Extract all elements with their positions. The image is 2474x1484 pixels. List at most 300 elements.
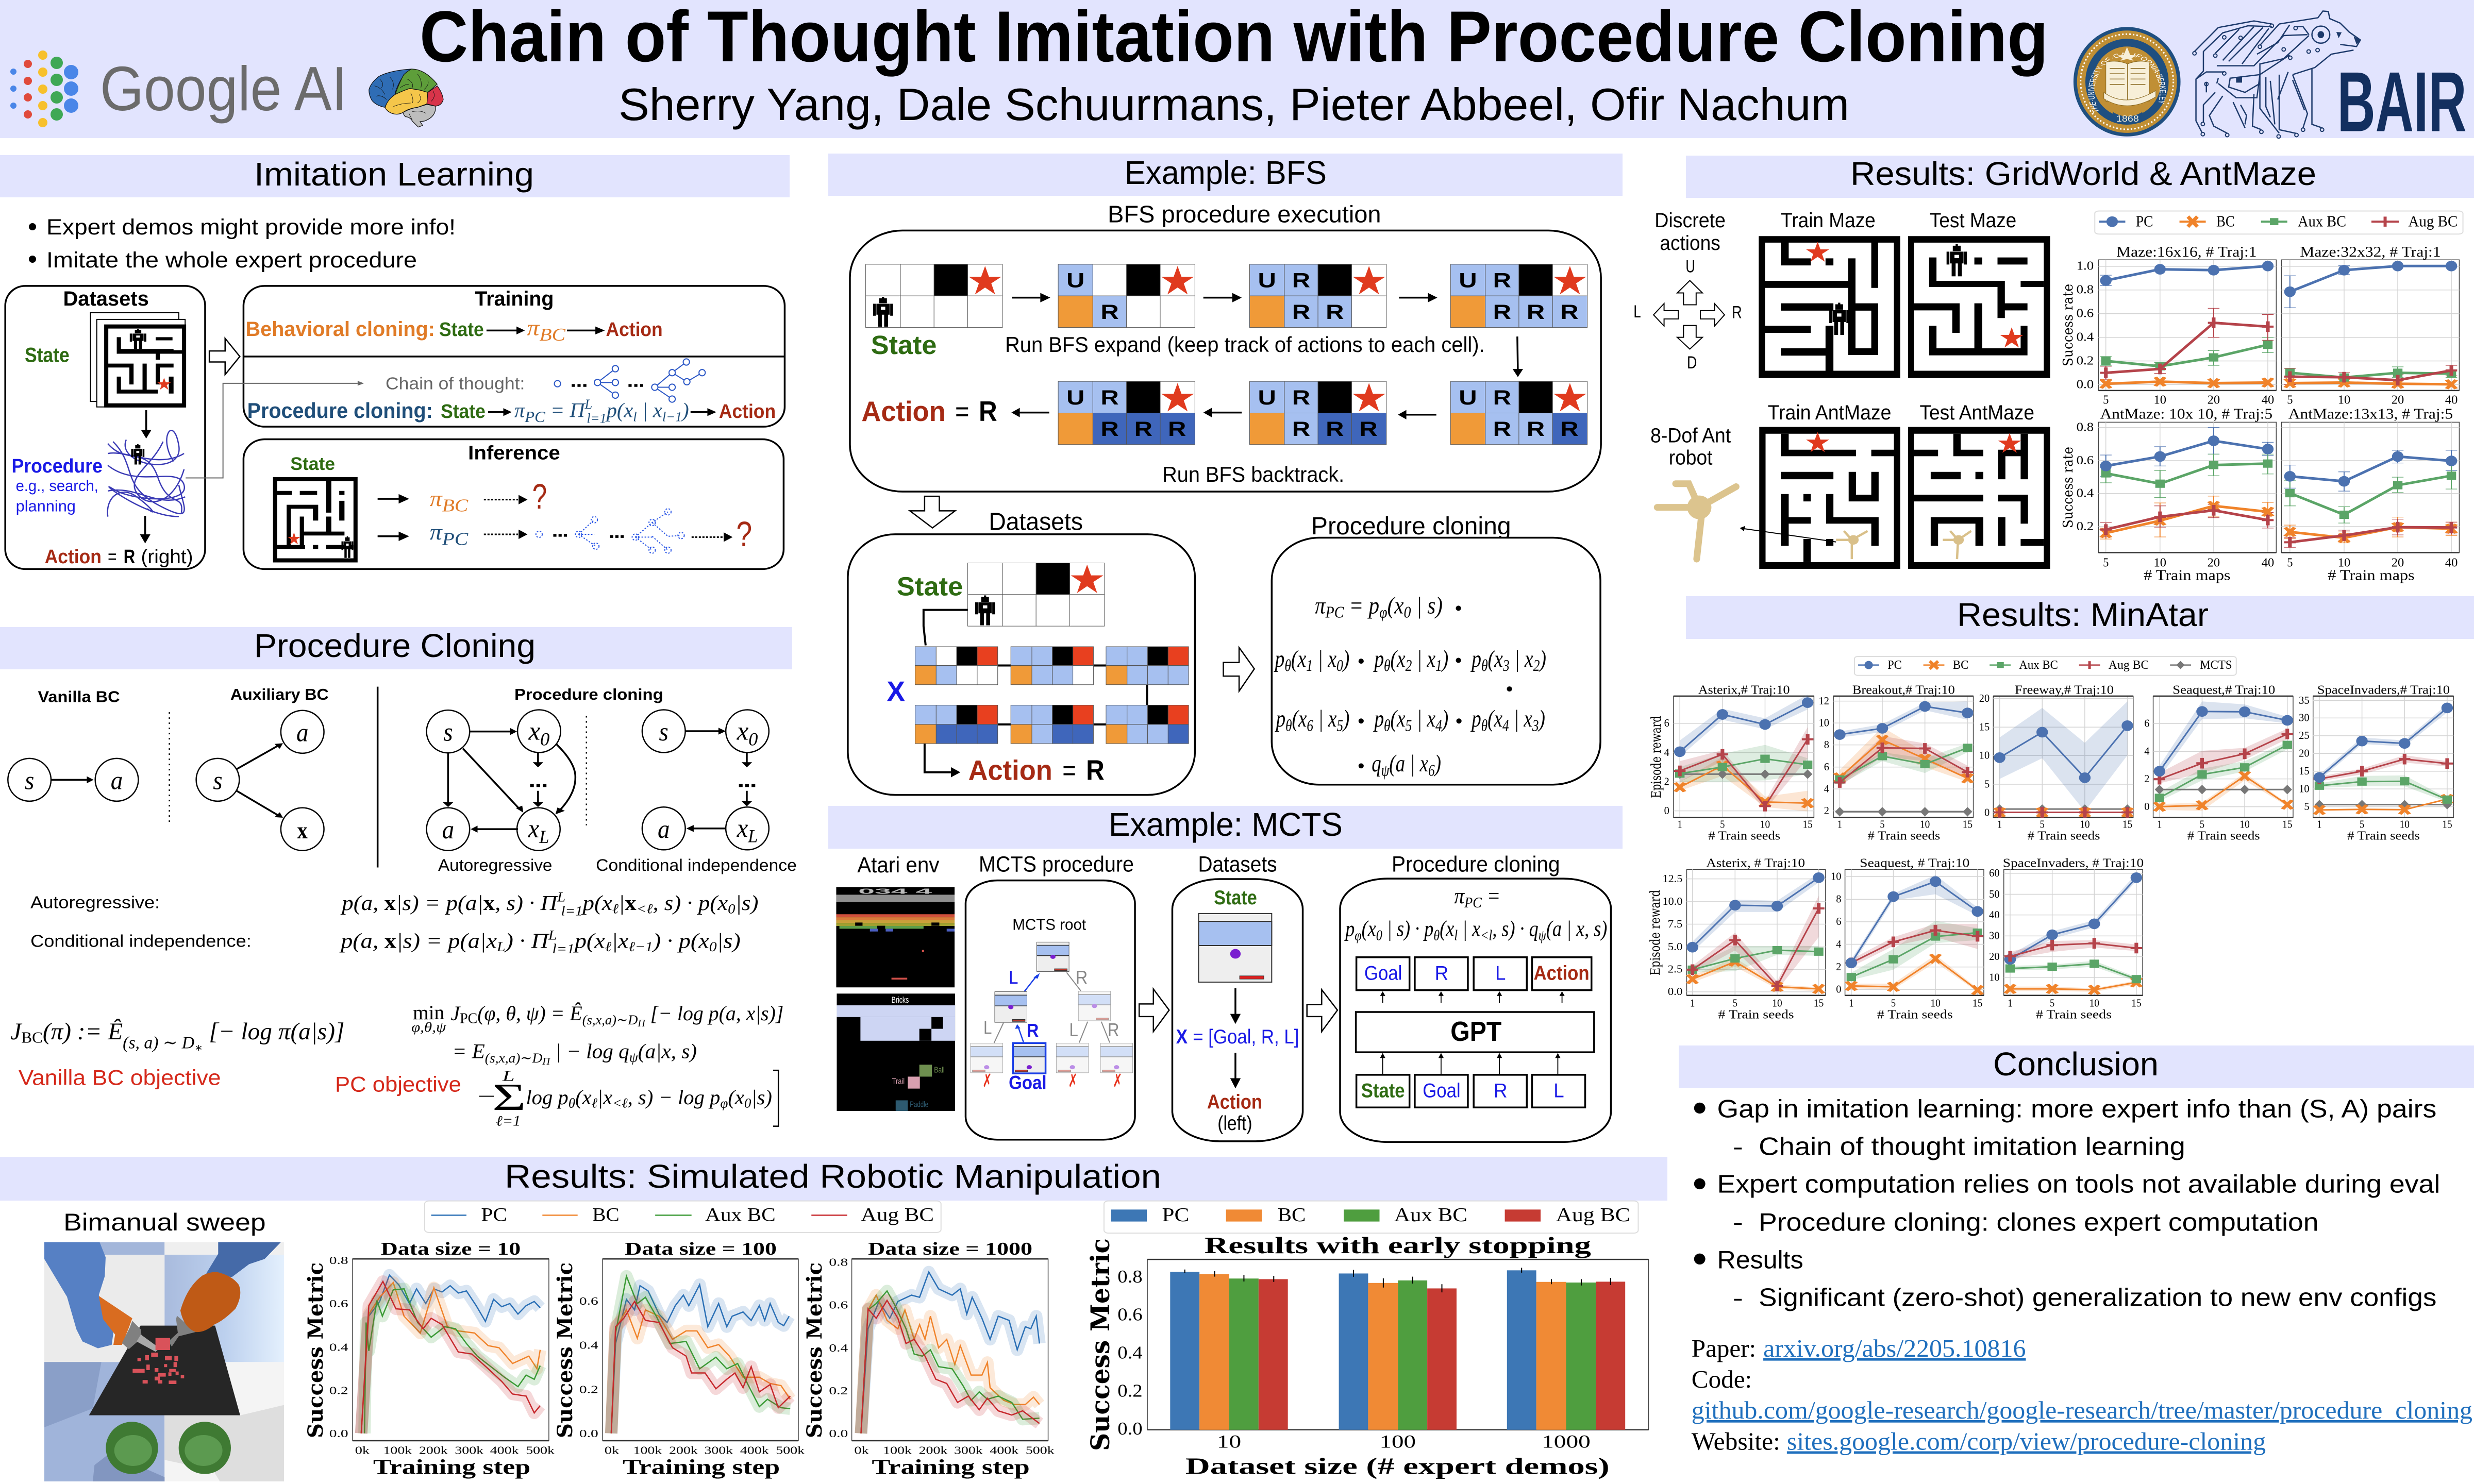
chart: data size 1000: 0.4 (829, 1342, 848, 1354)
diagram: procedure cloning factorization: ) (1537, 706, 1545, 732)
chart: Asterix second row: 0.0 (1668, 986, 1682, 998)
equation: PC objective: <ℓ (612, 1095, 628, 1111)
chart: SpaceInvaders second row: SpaceInvaders, # Traj:10 (2003, 856, 2144, 870)
diagram: procedure cloning factorization: 0 (1403, 603, 1411, 621)
chart: data size 100: 100k (633, 1444, 662, 1456)
diagram: training box: Action (719, 400, 776, 423)
chart: data size 100: Data size = 100 (625, 1239, 777, 1259)
text: intro bullets (29, 215, 456, 273)
chart: data size 1000: 300k (954, 1444, 983, 1456)
chart: Maze 16x16 success rate: 0.6 (2077, 306, 2094, 320)
chart: Breakout: 1 (1837, 818, 1842, 830)
chart: SpaceInvaders: 5 (2304, 801, 2310, 813)
chart: Seaquest second row: 2 (1836, 961, 1841, 973)
diagram: procedure cloning factorization: 0 (1336, 657, 1343, 674)
chart: data size 100: 0.6 (579, 1295, 598, 1307)
equation: conditional independence: L (548, 927, 557, 943)
diagram: procedure cloning factorization: PC (1325, 603, 1344, 621)
equation: conditional independence: ) · Π (504, 929, 550, 953)
heading: example MCTS (828, 806, 1623, 849)
chart: SpaceInvaders: 30 (2299, 712, 2310, 724)
chart: SpaceInvaders: 20 (2299, 748, 2310, 759)
chart: Asterix second row: 12.5 (1663, 873, 1682, 885)
graph: auxiliary BC: a (296, 718, 308, 747)
heading: conclusion (1679, 1045, 2474, 1088)
equation: vanilla BC objective: (s, a) ∼ D (123, 1034, 194, 1052)
diagram: inference box (243, 440, 783, 569)
chart: Freeway: 20 (1979, 693, 1990, 704)
chart: results with early stopping: 0.6 (1117, 1305, 1143, 1324)
chart: Asterix second row: 5 (1733, 998, 1737, 1009)
legend: minatar methods: Aug BC (2109, 658, 2149, 672)
chart: Asterix: # Train seeds (1708, 829, 1780, 842)
arrow: MCTS to datasets (1139, 989, 1169, 1032)
chart: Maze 32x32 success rate: 10 (2338, 393, 2350, 407)
equation: PC objective: PC objective (335, 1073, 461, 1097)
chart: data size 10: 0.4 (329, 1341, 348, 1353)
axis label: success rate bottom: Success rate (2061, 447, 2076, 528)
chart: Asterix: 0 (1664, 805, 1669, 817)
diagram: procedure cloning factorization: p (1374, 706, 1389, 732)
chart: SpaceInvaders second row: 10 (2089, 998, 2099, 1009)
text: column headings: Atari env (857, 853, 940, 878)
chart: Asterix second row: 15 (1814, 998, 1824, 1009)
diagram: MCTS tree: R (1076, 967, 1088, 988)
text: intro bullets: Expert demos might provide more info! (46, 215, 456, 240)
chart: Asterix second row: 10 (1772, 998, 1782, 1009)
diagram: datasets box: Action (45, 545, 102, 567)
chart: Seaquest second row: 0 (1836, 984, 1841, 995)
chart: SpaceInvaders: 10 (2299, 783, 2310, 795)
diagram: procedure cloning factorization: 6 (1428, 762, 1435, 779)
diagram: procedure cloning factorization: (x (1292, 706, 1307, 732)
equation: PC objective: Π (638, 1017, 646, 1029)
chart: data size 1000: 0k (854, 1444, 869, 1456)
diagram: MCTS datasets (1172, 879, 1303, 1141)
grid: backtrack step 2: R (1326, 418, 1344, 441)
axis label: success metric 1000: Success Metric (803, 1262, 827, 1438)
arrow: datasets to procedure cloning (1307, 990, 1338, 1032)
diagram: procedure cloning factorization: φ (1379, 603, 1388, 621)
chart: results with early stopping: Results with early stopping (1205, 1232, 1591, 1258)
diagram: procedure cloning factorization: | x (1510, 646, 1533, 672)
chart: data size 1000: 0.8 (829, 1256, 848, 1268)
diagram: procedure cloning factorization: ψ (1381, 762, 1390, 779)
text: maze labels: Test Maze (1930, 209, 2016, 232)
grid: backtrack step 2: R (1292, 386, 1310, 409)
logo: UC Berkeley seal (2073, 27, 2181, 137)
chart: results with early stopping: 0.2 (1117, 1381, 1143, 1401)
diagram: BFS execution box: Run BFS expand (keep track of actions to each cell). (1005, 332, 1485, 357)
chart: Seaquest: 2 (2144, 773, 2149, 785)
diagram: procedure cloning factorization: | x (1509, 706, 1532, 732)
diagram: GPT procedure cloning: (x (1362, 917, 1376, 941)
diagram: procedure cloning factorization: (x (1487, 706, 1502, 732)
equation: PC objective: , s) − log p (628, 1086, 720, 1109)
diagram: procedure cloning factorization: p (1472, 706, 1486, 732)
diagram: BFS datasets: Action (968, 755, 1052, 786)
chart: SpaceInvaders second row: 60 (1989, 867, 2000, 879)
chart: Asterix second row (1663, 856, 1826, 1021)
equation: PC objective: ψ (629, 1050, 638, 1065)
heading: example BFS (828, 154, 1623, 196)
chart: Seaquest: 1 (2157, 818, 2162, 830)
panel: results simulated robotic manipulation: Aug BC (861, 1204, 934, 1225)
diagram: procedure cloning factorization: θ (1481, 657, 1488, 674)
diagram: procedure cloning factorization: 2 (1533, 657, 1540, 674)
equation: conditional independence: ) · p(x (651, 929, 709, 953)
graph: procedure cloning autoregressive and conditional independence: x (529, 717, 546, 746)
diagram: training box: Training (475, 287, 554, 310)
diagram: GPT procedure cloning: PC (1464, 894, 1482, 910)
chart: Asterix: 2 (1664, 776, 1669, 788)
chart: AntMaze 10x10 success rate (2077, 406, 2276, 583)
chart: Maze 16x16 success rate: 0.8 (2077, 282, 2094, 296)
equation: vanilla BC objective: J (10, 1018, 27, 1045)
chart: data size 1000: 400k (990, 1444, 1018, 1456)
chart: data size 10: Data size = 10 (381, 1239, 521, 1259)
chart: Seaquest second row: # Train seeds (1877, 1007, 1953, 1021)
chart: SpaceInvaders: # Train seeds (2347, 829, 2420, 842)
chart: Seaquest second row: Seaquest, # Traj:10 (1860, 856, 1969, 870)
chart: AntMaze 13x13 success rate (2282, 406, 2459, 583)
diagram: MCTS tree: MCTS root (1012, 916, 1086, 933)
diagram: procedure cloning factorization: p (1276, 706, 1291, 732)
graph: procedure cloning autoregressive and conditional independence: a (658, 815, 670, 844)
diagram: MCTS tree: R (1108, 1020, 1119, 1040)
arrow: down to datasets (910, 496, 955, 528)
diagram: GPT procedure cloning: p (1345, 917, 1370, 941)
diagram: MCTS datasets: (left) (1217, 1111, 1252, 1134)
image: MinAtar breakout screen: Paddle (910, 1100, 928, 1109)
chart: Seaquest: Seaquest,# Traj:10 (2172, 683, 2275, 697)
panel: results simulated robotic manipulation: Aug BC (1556, 1204, 1630, 1225)
diagram: MCTS tree: L (983, 1018, 992, 1038)
equation: PC objective: (a|x, s) (638, 1040, 697, 1063)
chart: SpaceInvaders: 1 (2317, 818, 2322, 830)
diagram: procedure cloning factorization: 5 (1336, 717, 1343, 734)
chart: Seaquest: 10 (2239, 818, 2250, 830)
equation: PC objective: (s,x,a)∼D (582, 1013, 638, 1027)
heading: conclusion: Conclusion (1993, 1045, 2159, 1083)
grid: backtrack step 1: R (1493, 386, 1511, 409)
diagram: inference box: π (430, 486, 444, 511)
diagram: GPT procedure cloning: | s) · p (1382, 917, 1433, 941)
equation: PC objective: θ (569, 1095, 575, 1111)
grid: initial state (866, 264, 1002, 328)
chart: data size 1000: 100k (883, 1444, 912, 1456)
equation: autoregressive: l=1 (561, 903, 583, 919)
graph: vanilla BC: s (25, 766, 34, 795)
grid: backtrack step 1: U (1459, 386, 1477, 409)
chart: Breakout: # Train seeds (1867, 829, 1940, 842)
equation: conditional independence: p(x (573, 929, 605, 953)
diagram: training box: BC (540, 325, 566, 345)
diagram: GPT procedure cloning: 0 (1376, 927, 1382, 943)
diagram: training box: = Π (545, 399, 586, 422)
equation: PC objective: log p (526, 1086, 590, 1109)
heading: simulated robotic manipulation: Results: Simulated Robotic Manipulation (505, 1158, 1161, 1195)
graph: procedure cloning autoregressive and conditional independence: Procedure cloning (514, 686, 663, 703)
chart: Asterix (1664, 683, 1814, 842)
equation: autoregressive: L (557, 889, 565, 905)
equation: PC objective: J (450, 1002, 465, 1025)
chart: Asterix second row: Asterix, # Traj:10 (1706, 856, 1805, 870)
text: BFS procedure execution: BFS procedure execution (1108, 201, 1381, 228)
diagram: BFS execution box: Action (861, 396, 946, 428)
chart: data size 10: 0.8 (329, 1254, 348, 1267)
grid: BFS step 3: U (1459, 269, 1477, 292)
equation: autoregressive: x (625, 891, 637, 915)
chart: Freeway: 10 (2080, 818, 2090, 830)
legend: bar chart methods (1104, 1201, 1638, 1233)
chart: AntMaze 13x13 success rate: # Train maps (2328, 567, 2415, 583)
chart: Seaquest second row: 10 (1831, 870, 1841, 882)
chart: Asterix second row: 2.5 (1668, 964, 1682, 975)
diagram: datasets box: = (108, 545, 117, 567)
heading: procedure cloning (0, 627, 792, 669)
chart: data size 100: 0.4 (579, 1339, 598, 1351)
diagram: MCTS tree: ✗ (982, 1070, 992, 1091)
chart: data size 10 (329, 1239, 555, 1479)
diagram: training box: ) (681, 399, 689, 422)
diagram: procedure cloning factorization: q (1372, 751, 1386, 777)
chart: data size 100: 0.2 (579, 1383, 598, 1395)
equation: conditional independence: p(a, x|s) = p(a|x (341, 929, 534, 953)
diagram: procedure cloning factorization: (x (1488, 646, 1503, 672)
diagram: BFS execution box: = (955, 396, 969, 428)
legend: gridworld methods: Aux BC (2298, 212, 2346, 230)
chart: Breakout (1819, 683, 1974, 842)
chart: Seaquest second row: 5 (1891, 998, 1896, 1009)
chart: data size 10: 200k (419, 1444, 448, 1456)
chart: Maze 16x16 success rate: 0.0 (2077, 377, 2094, 391)
diagram: procedure cloning factorization: π (1315, 593, 1330, 619)
chart: data size 10: Training step (373, 1456, 530, 1479)
equation: conditional independence: L (496, 939, 506, 954)
graph: auxiliary BC: Auxiliary BC (230, 686, 329, 703)
legend: line chart methods: PC (481, 1204, 507, 1225)
diagram: GPT procedure cloning: Goal (1423, 1079, 1461, 1102)
text: maze labels (1768, 209, 2034, 424)
chart: SpaceInvaders: 5 (2360, 818, 2364, 830)
legend: minatar methods (1854, 656, 2236, 676)
diagram: procedure cloning factorization: θ (1384, 657, 1391, 674)
graph: procedure cloning autoregressive and conditional independence: 0 (540, 729, 549, 750)
chart: data size 1000: Training step (872, 1456, 1030, 1479)
maze: test maze (1908, 236, 2050, 378)
legend: bar chart methods: PC (1162, 1204, 1189, 1225)
diagram: training box: p(x (605, 399, 633, 422)
chart: Maze 16x16 success rate: 0.4 (2077, 330, 2094, 344)
grid: BFS step 2: U (1258, 269, 1276, 292)
chart: AntMaze 10x10 success rate: AntMaze: 10x 10, # Traj:5 (2100, 406, 2272, 422)
diagram: BFS execution box (850, 230, 1601, 492)
equation: autoregressive: 0 (728, 901, 735, 917)
diagram: GPT procedure cloning: R (1494, 1079, 1507, 1102)
diagram: BFS execution box: R (979, 396, 997, 428)
chart: data size 100: 200k (669, 1444, 698, 1456)
chart: Maze 32x32 success rate: 40 (2445, 393, 2458, 407)
chart: SpaceInvaders second row: 15 (2131, 998, 2142, 1009)
diagram: procedure cloning factorization: p (1374, 646, 1389, 672)
equation: PC objective: PC (460, 1010, 477, 1026)
chart: AntMaze 13x13 success rate: 20 (2392, 555, 2404, 569)
legend: gridworld methods: PC (2136, 212, 2153, 230)
diagram: procedure cloning factorization: | s) (1411, 593, 1443, 619)
diagram: training box: Action (606, 318, 663, 341)
text: conclusion bullets (1694, 1095, 2440, 1311)
panel: imitation learning (0, 155, 790, 569)
equation: autoregressive: p(x (581, 891, 612, 915)
diagram: MCTS datasets: State (1214, 886, 1257, 909)
maze: train maze (1759, 236, 1900, 378)
graph: procedure cloning autoregressive and conditional independence: x (737, 814, 755, 842)
diagram: GPT procedure cloning: ψ (1539, 927, 1547, 943)
chart: Breakout: 10 (1920, 818, 1930, 830)
diagram: procedure cloning factorization: ) (1342, 646, 1349, 672)
grid: BFS step 2: R (1292, 301, 1310, 324)
text: links: Website: (1692, 1428, 1780, 1456)
diagram: procedure cloning factorization: θ (1285, 717, 1292, 734)
chart: SpaceInvaders second row: 10 (1989, 972, 2000, 984)
graph: procedure cloning autoregressive and conditional independence: a (442, 816, 454, 845)
legend: bar chart methods: BC (1278, 1204, 1306, 1225)
diagram: procedure cloning factorization: 6 (1307, 717, 1313, 734)
legend: line chart methods: BC (592, 1204, 620, 1225)
diagram: training box: l (633, 409, 637, 424)
chart: Maze 16x16 success rate: 10 (2154, 393, 2166, 407)
icon: 8-dof ant robot (1650, 424, 1836, 559)
diagram: procedure cloning factorization: ) (1441, 706, 1448, 732)
diagram: procedure cloning factorization: ) (1441, 646, 1448, 672)
grid: BFS step 2 (1249, 264, 1386, 328)
text: links: arxiv.org/abs/2205.10816 (1763, 1335, 2026, 1362)
diagram: procedure cloning factorization: (x (1391, 706, 1406, 732)
chart: Maze 16x16 success rate: 5 (2103, 393, 2109, 407)
diagram: procedure cloning factorization: 1 (1435, 657, 1442, 674)
chart: Asterix second row: 10.0 (1663, 896, 1682, 907)
logo: UC Berkeley seal: THE·UNIVERSITY·OF·CALIFORNIA·BERKELEY (2088, 53, 2166, 113)
graph: procedure cloning autoregressive and conditional independence: L (539, 827, 549, 847)
chart: Seaquest second row: 1 (1849, 998, 1853, 1009)
diagram: MCTS tree: R (1027, 1020, 1039, 1041)
chart: Maze 16x16 success rate: Maze:16x16, # Traj:1 (2116, 243, 2257, 260)
chart: Freeway: 15 (2122, 818, 2132, 830)
chart: SpaceInvaders: 25 (2299, 730, 2310, 741)
legend: minatar methods: PC (1887, 658, 1902, 672)
diagram: inference box: Inference (468, 442, 560, 464)
chart: Maze 16x16 success rate: 1.0 (2077, 259, 2094, 273)
chart: AntMaze 13x13 success rate: 40 (2445, 555, 2458, 569)
diagram: procedure cloning factorization: p (1275, 646, 1290, 672)
chart: results with early stopping: 1000 (1542, 1431, 1591, 1452)
diagram: inference box: ? (532, 477, 547, 517)
axis label: episode reward bottom: Episode reward (1648, 890, 1663, 975)
chart: Breakout: 10 (1819, 717, 1829, 729)
chart: AntMaze 10x10 success rate: # Train maps (2144, 567, 2231, 583)
grid: BFS step 3: R (1493, 269, 1511, 292)
text: (a | x, s) (1546, 917, 1607, 941)
chart: Breakout: 15 (1963, 818, 1972, 830)
grid: backtrack step 3: R (1100, 386, 1119, 409)
axis label: success metric bars: Success Metric (1085, 1238, 1115, 1451)
chart: Freeway: 1 (1997, 818, 2002, 830)
chart: data size 100: 400k (740, 1444, 769, 1456)
chart: data size 10: 0.2 (329, 1384, 348, 1396)
diagram: procedure cloning factorization: | x (1412, 646, 1435, 672)
legend: bar chart methods: Aux BC (1394, 1204, 1467, 1225)
diagram: procedure cloning factorization: (x (1391, 646, 1406, 672)
equation: PC objective: φ,θ,ψ (411, 1020, 446, 1035)
diagram: procedure cloning factorization: 3 (1502, 657, 1510, 674)
diagram: training box: π (527, 315, 542, 340)
grid: backtrack step 1: R (1527, 418, 1545, 441)
equation: PC objective: ℓ=1 (496, 1112, 521, 1129)
chart: Seaquest: 0 (2144, 801, 2149, 813)
legend: line chart methods: Aux BC (705, 1204, 776, 1225)
legend: minatar methods: Aux BC (2019, 658, 2058, 672)
chart: Asterix: 15 (1802, 818, 1813, 830)
chart: Seaquest second row (1831, 856, 1984, 1021)
chart: Seaquest: 4 (2144, 746, 2149, 757)
grid: backtrack step 3: R (1168, 418, 1186, 441)
chart: results with early stopping: 0.8 (1117, 1267, 1143, 1287)
grid: backtrack step 2: U (1258, 386, 1276, 409)
diagram: GPT procedure cloning: L (1553, 1079, 1564, 1102)
image: Atari breakout screen (836, 887, 955, 987)
diagram: discrete actions: U (1685, 256, 1695, 276)
diagram: inference box: PC (442, 529, 469, 549)
equation: autoregressive: p(a, x|s) = p(a|x, s) · Π (342, 891, 583, 915)
diagram: BFS datasets: X (887, 676, 905, 707)
chart: Seaquest: 15 (2282, 818, 2292, 830)
chart: SpaceInvaders: 15 (2299, 765, 2310, 777)
diagram: GPT procedure cloning: , s) · q (1492, 917, 1539, 941)
diagram: inference box: ? (737, 515, 752, 554)
diagram: procedure cloning factorization (1272, 538, 1600, 785)
chart: data size 10: 0.0 (329, 1427, 348, 1440)
diagram: MCTS tree: ✗ (1113, 1070, 1123, 1091)
text: links (1692, 1335, 2472, 1456)
image: MinAtar breakout screen (837, 993, 955, 1111)
chart: AntMaze 13x13 success rate: 10 (2338, 555, 2350, 569)
equation: PC objective: (s,x,a)∼D (485, 1050, 542, 1066)
text: maze labels: Train AntMaze (1768, 401, 1891, 424)
chart: AntMaze 10x10 success rate: 10 (2154, 555, 2166, 569)
heading: simulated robotic manipulation (0, 1157, 1667, 1201)
graph: procedure cloning autoregressive and conditional independence: s (443, 718, 453, 747)
diagram: procedure cloning factorization: 3 (1532, 717, 1539, 734)
chart: results with early stopping: Dataset size (# expert demos) (1185, 1453, 1610, 1479)
panel: procedure cloning (0, 627, 797, 1129)
diagram: datasets box: planning (16, 497, 76, 515)
diagram: GPT procedure cloning: R (1435, 962, 1448, 984)
chart: Maze 16x16 success rate: 20 (2208, 393, 2220, 407)
maze: test antmaze (1908, 427, 2050, 569)
diagram: datasets box (5, 286, 205, 569)
chart: Asterix: 4 (1664, 747, 1669, 758)
equation: conditional independence: |x (611, 929, 629, 953)
panel: example MCTS: = [Goal, R, L] (1193, 1025, 1299, 1048)
equation: autoregressive: |s) (735, 891, 758, 915)
logo text: Google AI: Google AI (100, 54, 347, 124)
chart: SpaceInvaders second row: # Train seeds (2036, 1007, 2112, 1021)
chart: data size 1000: Data size = 1000 (868, 1239, 1032, 1259)
grid: backtrack step 1: R (1493, 418, 1511, 441)
grid: BFS step 3: R (1527, 301, 1545, 324)
diagram: inference box: BC (442, 495, 469, 515)
